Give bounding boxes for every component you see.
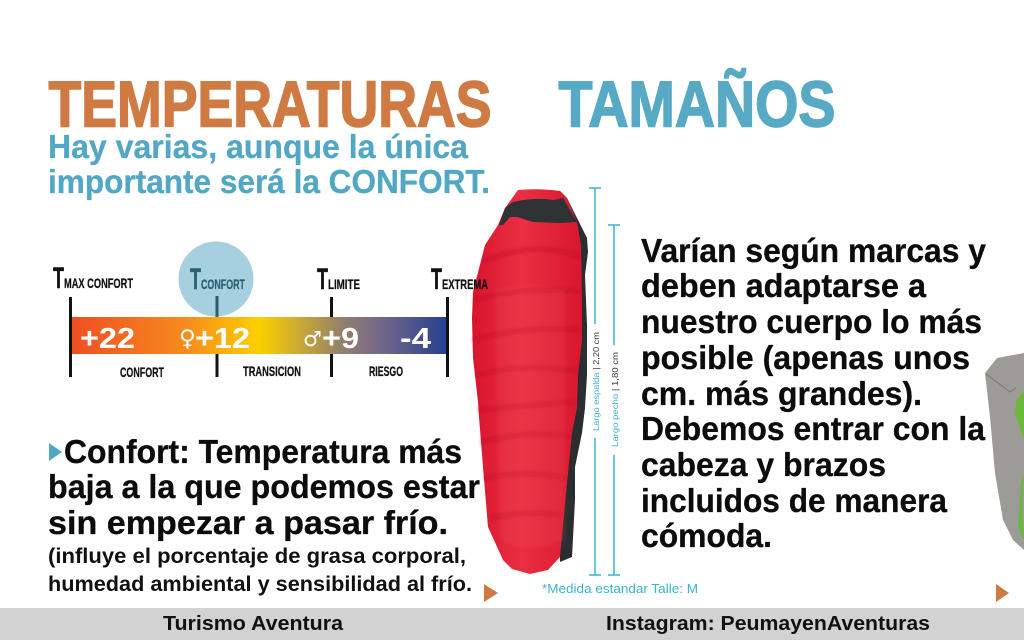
label: T confort: T <box>190 263 201 296</box>
text block: sizes: cómoda. <box>641 517 772 554</box>
temperature scale chart <box>53 242 449 380</box>
text block: confort definition: sin empezar a pasar frío. <box>48 504 448 541</box>
text block: confort definition: humedad ambiental y sensibilidad al frío. <box>48 572 472 596</box>
text block: sizes: incluidos de manera <box>641 482 948 519</box>
label: T extrema <box>431 263 488 296</box>
text block: sizes <box>641 232 987 554</box>
arrow: right page <box>996 584 1009 602</box>
measurement: largo pecho <box>608 225 620 575</box>
zone labels <box>120 363 403 380</box>
label: T extrema: T <box>431 263 442 296</box>
bar values: ♀ <box>179 326 196 352</box>
text block: sizes: posible (apenas unos <box>641 339 970 376</box>
bar values: -4 <box>400 323 431 355</box>
label: T confort: CONFORT <box>201 276 245 292</box>
gradient bar <box>72 317 447 354</box>
title: temperaturas: TEMPERATURAS <box>48 67 491 140</box>
bar values: +22 <box>80 323 135 355</box>
subtitle: Hay varias, aunque la única <box>48 128 469 165</box>
zone labels: RIESGO <box>369 363 403 379</box>
text block: confort definition: baja a la que podemos estar <box>48 468 480 505</box>
highlight panel <box>495 285 565 548</box>
hood opening <box>499 198 577 225</box>
text block: confort definition <box>48 433 480 596</box>
label: T limite: LIMITE <box>328 276 360 292</box>
label: T max confort <box>53 262 133 295</box>
bar values: +12 <box>195 323 250 355</box>
highlight circle: T confort <box>178 242 254 316</box>
label: T confort <box>190 263 245 296</box>
text block: sizes: cm. más grandes). <box>641 375 922 412</box>
zone labels: CONFORT <box>120 364 164 380</box>
text block: sizes: Debemos entrar con la <box>641 410 986 447</box>
measurement: largo pecho: Largo pecho | 1,80 cm <box>611 352 620 447</box>
subtitle: importante será la CONFORT. <box>48 163 490 200</box>
bar values: +9 <box>322 323 359 355</box>
text block: confort definition: Confort: Temperatura más <box>64 433 462 470</box>
sleeping bag: grey and green <box>985 353 1024 550</box>
dark back panel <box>560 191 588 562</box>
title: tamaños: TAMAÑOS <box>558 67 836 140</box>
text block: sizes: Varían según marcas y <box>641 232 987 269</box>
sleeping bag: red <box>472 189 588 574</box>
footer bar <box>0 608 1024 640</box>
text block: sizes: nuestro cuerpo lo más <box>641 303 982 340</box>
bar values <box>80 323 431 355</box>
label: T limite <box>317 263 360 296</box>
subtitle <box>48 128 490 200</box>
grey shell <box>985 353 1024 550</box>
quilting lines <box>473 249 580 518</box>
green lining <box>1015 390 1024 540</box>
bag body <box>472 189 582 574</box>
text block: sizes: deben adaptarse a <box>641 267 927 304</box>
label: T limite: T <box>317 263 328 296</box>
label: T max confort: T <box>53 262 64 295</box>
icon: blue bullet <box>49 443 62 461</box>
text block: sizes: cabeza y brazos <box>641 446 886 483</box>
measurement: largo espalda <box>589 188 601 575</box>
scale ticks <box>69 296 449 377</box>
label: T extrema: EXTREMA <box>442 276 488 292</box>
size note: *Medida estandar Talle: M <box>542 581 698 596</box>
footer: left label: Turismo Aventura <box>163 613 344 635</box>
label: T max confort: MAX CONFORT <box>64 275 133 291</box>
footer: right label: Instagram: PeumayenAventuras <box>606 613 930 635</box>
arrow: left page <box>484 584 498 602</box>
hood fold <box>986 374 1016 392</box>
bar values: ♂ <box>303 327 322 351</box>
measurement: largo espalda: Largo espalda | 2,20 cm <box>592 332 601 431</box>
zone labels: TRANSICION <box>243 363 301 379</box>
text block: confort definition: (influye el porcentaje de grasa corporal, <box>48 544 466 568</box>
